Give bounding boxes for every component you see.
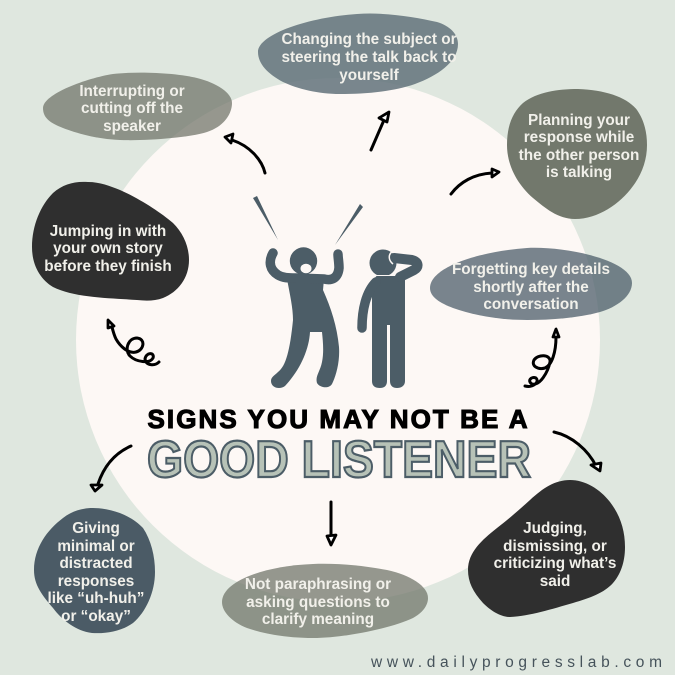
panel: not paraphrasing: clarify meaning — [262, 611, 374, 628]
icon: shouting person — [253, 196, 363, 388]
heading: good listener: GOOD LISTENER — [147, 431, 531, 489]
panel: jumping in: Jumping in with — [50, 223, 166, 240]
arrow: to forgetting — [525, 329, 559, 386]
panel: planning your response: the other person — [519, 147, 639, 164]
panel: judging: said — [540, 573, 570, 590]
heading: signs you may not be a: SIGNS YOU MAY NOT BE A — [148, 404, 528, 434]
panel: forgetting key details: Forgetting key details — [452, 261, 610, 278]
panel: jumping in: your own story — [53, 240, 163, 257]
panel: giving minimal responses: like “uh-huh” — [48, 590, 144, 607]
panel: giving minimal responses — [34, 508, 155, 633]
panel: not paraphrasing: Not paraphrasing or — [245, 576, 391, 593]
panel: interrupting — [43, 73, 232, 140]
panel: changing the subject: steering the talk back to — [281, 49, 457, 66]
panel: giving minimal responses: Giving — [72, 520, 120, 537]
panel: giving minimal responses: responses — [58, 573, 134, 590]
arrow: to changing the subject — [371, 112, 389, 150]
arrow: to not paraphrasing — [327, 502, 336, 545]
panel: not paraphrasing: asking questions to — [246, 594, 390, 611]
panel: not paraphrasing — [222, 564, 428, 638]
panel: interrupting: cutting off the — [81, 100, 183, 117]
arrow: to giving — [91, 446, 131, 491]
panel: interrupting: speaker — [103, 118, 161, 135]
panel: judging: criticizing what’s — [494, 555, 616, 572]
panel: changing the subject — [258, 14, 458, 94]
panel: planning your response: response while — [524, 129, 634, 146]
arrow: to interrupting — [225, 134, 265, 173]
panel: giving minimal responses: distracted — [59, 555, 133, 572]
panel: jumping in: before they finish — [44, 258, 172, 275]
panel: judging: dismissing, or — [503, 538, 607, 555]
panel: planning your response: is talking — [546, 164, 612, 181]
arrow: to judging — [554, 432, 601, 471]
panel: changing the subject: Changing the subject or — [281, 31, 457, 48]
website url: www.dailyprogresslab.com — [370, 654, 662, 671]
panel: giving minimal responses: minimal or — [57, 538, 135, 555]
arrow: to planning — [451, 169, 499, 194]
panel: jumping in — [32, 182, 189, 301]
panel: judging — [468, 480, 625, 617]
panel: planning your response — [507, 89, 647, 219]
background circle — [76, 78, 600, 602]
arrow: to jumping in — [108, 320, 159, 365]
panel: planning your response: Planning your — [528, 112, 630, 129]
panel: changing the subject: yourself — [339, 67, 400, 84]
panel: forgetting key details: conversation — [483, 296, 579, 313]
icon: person scratching head — [362, 250, 418, 388]
panel: forgetting key details: shortly after the — [473, 279, 589, 296]
panel: interrupting: Interrupting or — [79, 83, 185, 100]
panel: forgetting key details — [430, 248, 632, 320]
panel: giving minimal responses: or “okay” — [61, 608, 131, 625]
panel: judging: Judging, — [523, 520, 587, 537]
